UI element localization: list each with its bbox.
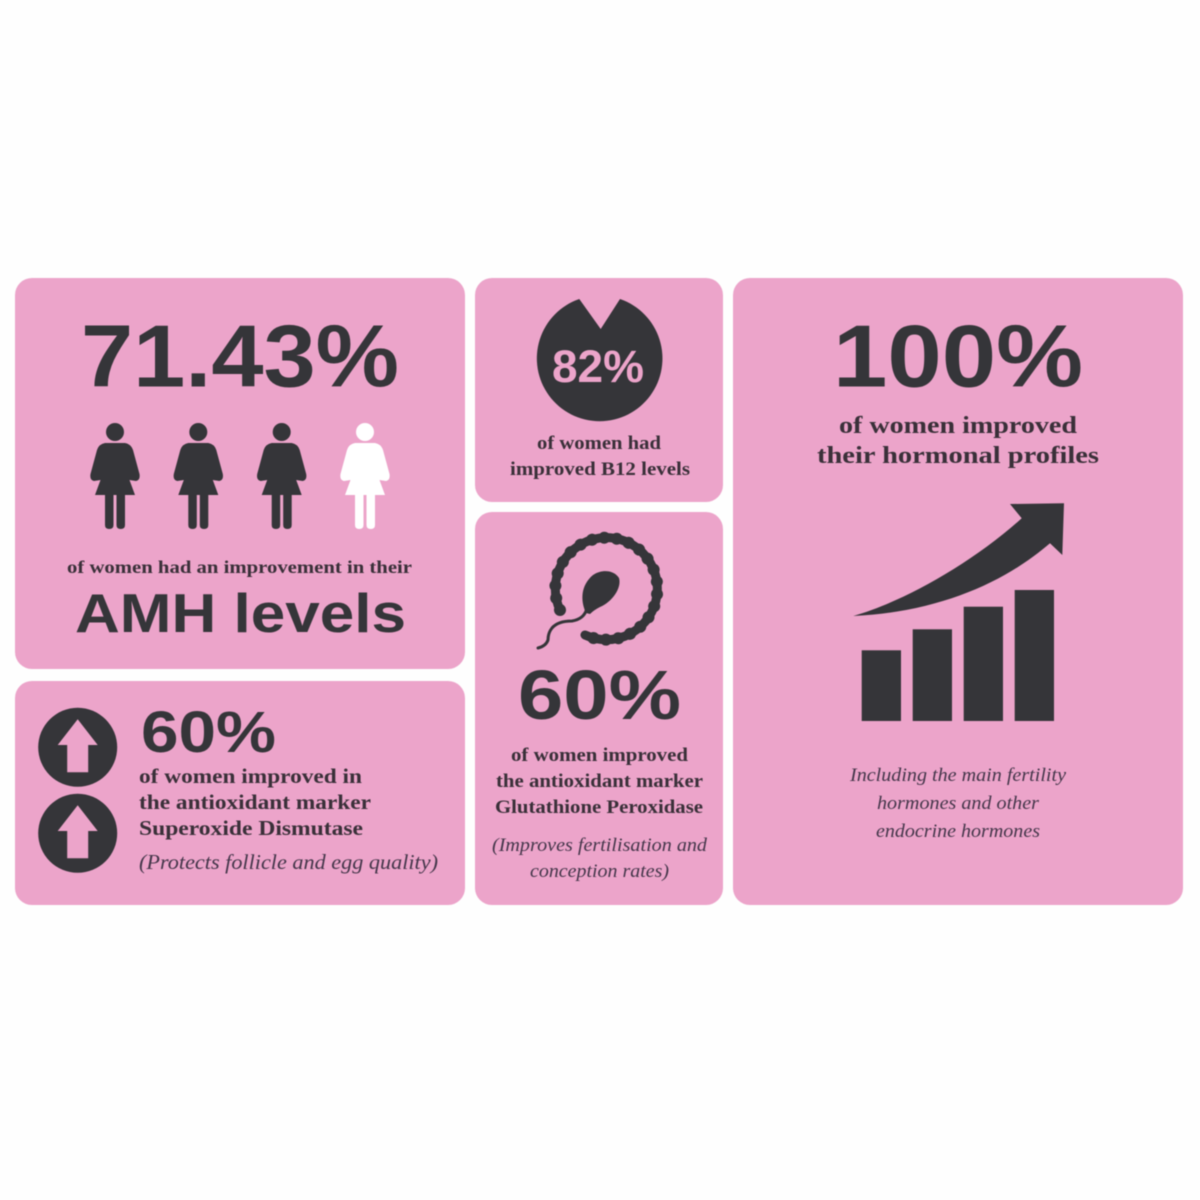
text: fertility hormones note: Including the main fertility — [849, 765, 1067, 786]
heading: AMH levels: AMH levels — [75, 582, 406, 644]
text: Glutathione Peroxidase description: the antioxidant marker — [496, 772, 703, 792]
heading: 71.43%: 71.43% — [81, 306, 399, 406]
text: Glutathione Peroxidase description: Glutathione Peroxidase — [495, 798, 703, 818]
heading: 60%: 60% — [141, 700, 276, 765]
panel: hormonal profiles — [733, 278, 1183, 905]
icon: sperm and egg — [538, 538, 657, 648]
icon: up arrow bottom — [38, 794, 117, 873]
text: Superoxide Dismutase description: Superoxide Dismutase — [139, 816, 363, 840]
text: Superoxide Dismutase description — [139, 764, 371, 840]
text: hormonal profiles description — [817, 412, 1099, 469]
text: improvement description: of women had an improvement in their — [67, 557, 412, 577]
text: hormonal profiles description: their hormonal profiles — [817, 442, 1099, 469]
text: fertilisation note: conception rates) — [530, 861, 669, 882]
text: B12 description — [510, 434, 690, 480]
heading: 60%: 60% — [518, 656, 681, 734]
text: fertility hormones note — [849, 765, 1067, 842]
text: fertility hormones note: hormones and other — [877, 793, 1040, 814]
text: protects follicle note: (Protects follicle and egg quality) — [139, 850, 438, 874]
icon: four women, three dark and one white — [90, 423, 390, 529]
text: fertilisation note — [492, 835, 708, 882]
panel: B12 levels — [475, 278, 723, 502]
text: Superoxide Dismutase description: the antioxidant marker — [139, 790, 371, 814]
chart: rising bars — [862, 590, 1054, 721]
text: Superoxide Dismutase description: of women improved in — [139, 764, 362, 788]
panel: Glutathione Peroxidase — [475, 512, 723, 905]
text: B12 description: of women had — [537, 434, 662, 454]
panel: AMH levels — [15, 278, 465, 669]
text: fertility hormones note: endocrine hormones — [876, 821, 1040, 842]
chart: 82% pie — [537, 299, 662, 421]
chart: 82% pie: 82% — [552, 341, 644, 392]
heading: 100%: 100% — [833, 306, 1083, 406]
icon: up arrow top — [38, 708, 117, 787]
text: fertilisation note: (Improves fertilisation and — [492, 835, 708, 856]
arrow: upward curve — [853, 503, 1064, 616]
panel: Superoxide Dismutase — [15, 681, 465, 905]
text: Glutathione Peroxidase description — [495, 746, 703, 818]
text: hormonal profiles description: of women improved — [839, 412, 1077, 439]
text: B12 description: improved B12 levels — [510, 460, 690, 480]
text: Glutathione Peroxidase description: of women improved — [511, 746, 689, 766]
